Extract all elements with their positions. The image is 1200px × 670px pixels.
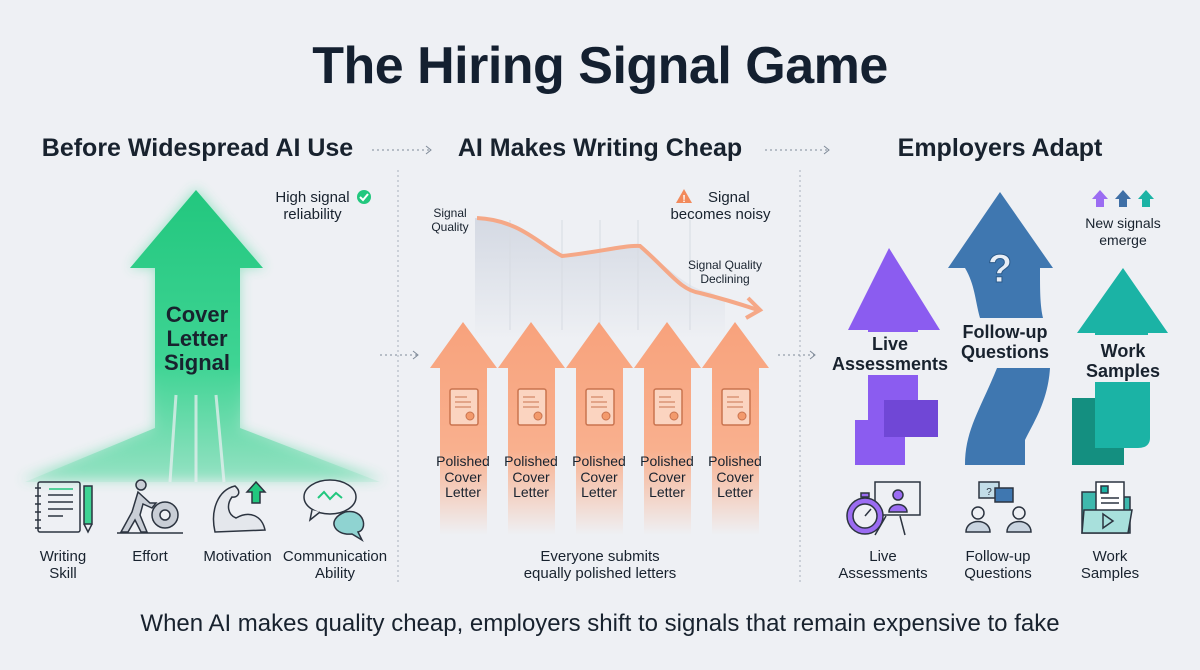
- text: follow-up questions: Questions: [961, 342, 1049, 362]
- text: new signals emerge: New signals: [1085, 215, 1161, 231]
- text: signal quality declining: Declining: [700, 272, 750, 286]
- text: cover letter signal: [164, 302, 230, 375]
- text: high signal reliability: reliability: [283, 206, 342, 223]
- icon: motivation: [214, 482, 265, 532]
- icon: follow-up questions: [966, 482, 1031, 532]
- labels: right icons: Samples: [1081, 565, 1139, 582]
- labels: right icons: Assessments: [838, 565, 928, 582]
- text: signal quality: Signal: [433, 206, 467, 220]
- icon: warning: [676, 189, 692, 205]
- text: high signal reliability: High signal: [275, 189, 350, 206]
- text: live assessments: Assessments: [832, 354, 948, 374]
- icon: new signal arrows: [1092, 190, 1154, 207]
- title: The Hiring Signal Game: [312, 37, 888, 95]
- arrow: heading connector 2: [765, 146, 829, 154]
- icon: work samples: [1082, 482, 1132, 533]
- text: work samples: [1086, 341, 1160, 381]
- icon: live assessment: [847, 482, 920, 535]
- arrow: mid connector 2: [778, 351, 815, 359]
- text: signal quality declining: [688, 258, 762, 286]
- text: signal quality: [431, 206, 469, 234]
- labels: polished cover letters: Polished: [708, 453, 762, 469]
- labels: left icons: Skill: [49, 565, 77, 582]
- arrow: heading connector 1: [372, 146, 431, 154]
- icon: warning: !: [682, 194, 686, 205]
- labels: left icons: [40, 548, 387, 582]
- labels: polished cover letters: Letter: [445, 484, 481, 500]
- heading: employers adapt: Employers Adapt: [898, 134, 1102, 162]
- labels: polished cover letters: Letter: [649, 484, 685, 500]
- labels: polished cover letters: Letter: [717, 484, 753, 500]
- text: signal quality: Quality: [431, 220, 469, 234]
- text: everyone submits: equally polished letters: [524, 565, 676, 582]
- text: signal becomes noisy: Signal: [708, 189, 750, 206]
- labels: right icons: Live: [869, 548, 897, 565]
- text: everyone submits: Everyone submits: [540, 548, 660, 565]
- blue arrow: [948, 192, 1053, 465]
- text: new signals emerge: [1085, 215, 1161, 248]
- text: signal quality declining: Signal Quality: [688, 258, 762, 272]
- text: everyone submits: [524, 548, 676, 582]
- text: new signals emerge: emerge: [1099, 232, 1147, 248]
- purple arrow: [848, 248, 940, 465]
- labels: polished cover letters: Cover: [648, 468, 686, 484]
- labels: right icons: Questions: [964, 565, 1032, 582]
- labels: polished cover letters: Cover: [444, 468, 482, 484]
- labels: polished cover letters: Polished: [572, 453, 626, 469]
- teal arrow: [1072, 268, 1168, 465]
- labels: polished cover letters: Polished: [640, 453, 694, 469]
- labels: polished cover letters: Cover: [512, 468, 550, 484]
- green arrow: [20, 188, 385, 482]
- icon: communication: [304, 480, 364, 540]
- dividers: [397, 170, 399, 582]
- text: cover letter signal: Signal: [164, 350, 230, 375]
- icon: writing skill: [35, 482, 92, 532]
- labels: right icons: Follow-up: [965, 548, 1031, 565]
- text: signal becomes noisy: [670, 189, 771, 223]
- bottom caption: When AI makes quality cheap, employers shift to signals that remain expensive to fake: [140, 610, 1060, 637]
- labels: left icons: Writing: [40, 548, 86, 565]
- labels: left icons: Communication: [283, 548, 387, 565]
- text: work samples: Samples: [1086, 361, 1160, 381]
- text: cover letter signal: Letter: [166, 326, 228, 351]
- labels: polished cover letters: Polished: [436, 453, 490, 469]
- text: live assessments: Live: [872, 334, 908, 354]
- orange arrows: [430, 322, 769, 535]
- heading: before: Before Widespread AI Use: [42, 134, 353, 162]
- icon: follow-up questions: ?: [986, 487, 992, 498]
- labels: left icons: Effort: [132, 548, 168, 565]
- labels: polished cover letters: Cover: [580, 468, 618, 484]
- labels: polished cover letters: Letter: [581, 484, 617, 500]
- chart: signal quality: [475, 218, 760, 340]
- labels: polished cover letters: [436, 453, 762, 500]
- labels: polished cover letters: Cover: [716, 468, 754, 484]
- icon: check: [357, 190, 371, 204]
- labels: left icons: Ability: [315, 565, 355, 582]
- labels: polished cover letters: Letter: [513, 484, 549, 500]
- text: signal becomes noisy: becomes noisy: [670, 206, 771, 223]
- labels: right icons: Work: [1093, 548, 1127, 565]
- labels: polished cover letters: Polished: [504, 453, 558, 469]
- arrow: mid connector 1: [380, 351, 418, 359]
- text: work samples: Work: [1101, 341, 1145, 361]
- labels: right icons: [838, 548, 1139, 582]
- text: live assessments: [832, 334, 948, 374]
- heading: AI makes writing cheap: AI Makes Writing Cheap: [458, 134, 742, 162]
- text: high signal reliability: [275, 189, 350, 223]
- icon: effort: [117, 480, 183, 533]
- icon: question mark: ?: [988, 247, 1012, 291]
- labels: left icons: Motivation: [203, 548, 272, 565]
- text: follow-up questions: Follow-up: [962, 322, 1047, 342]
- text: cover letter signal: Cover: [166, 302, 228, 327]
- text: follow-up questions: [961, 322, 1049, 362]
